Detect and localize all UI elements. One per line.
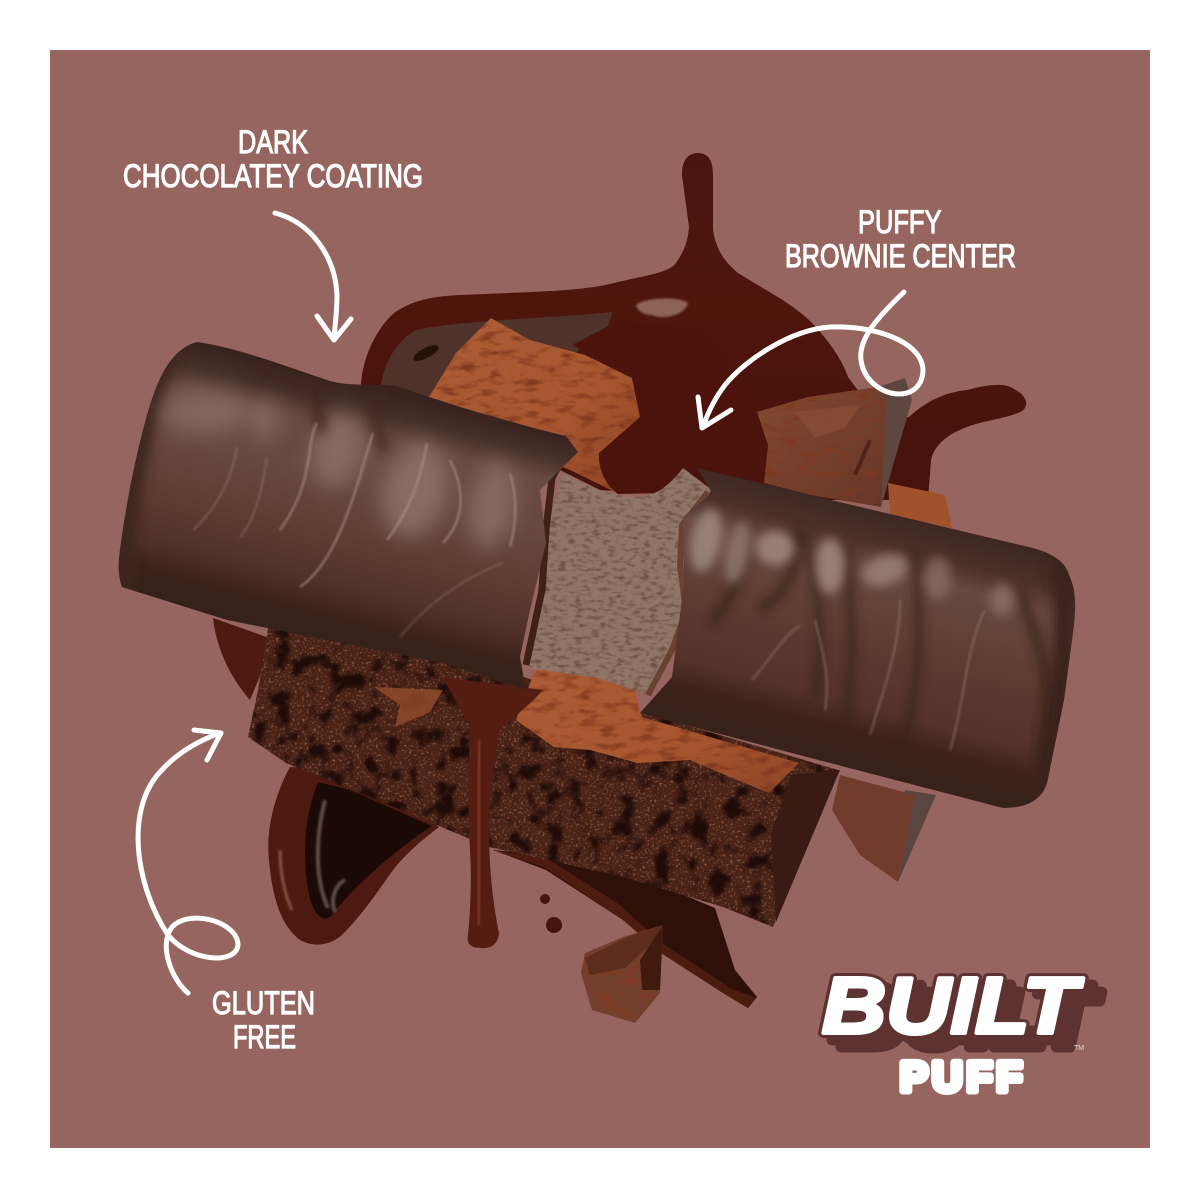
bar: right edge shadow xyxy=(1040,560,1066,800)
label: puffy brownie center: BROWNIE CENTER xyxy=(785,238,1016,274)
logo: Built Puff: BUILT xyxy=(822,961,1084,1050)
logo: Built Puff: BUILT xyxy=(831,968,1093,1057)
label: gluten free: GLUTEN xyxy=(212,985,315,1021)
chocolate droplets xyxy=(540,894,562,933)
brownie: top slab xyxy=(429,318,640,492)
filling: crumbly right edge xyxy=(648,492,708,695)
bar: right half xyxy=(640,468,1076,808)
product illustration: chocolate, brownie and bars xyxy=(100,153,1100,1023)
swoosh grey swirl xyxy=(318,800,345,912)
bar: dark creases left xyxy=(308,396,392,454)
logo: Built Puff: PUFF xyxy=(900,1053,1022,1100)
brownie: dark side face xyxy=(771,770,840,922)
swoosh dark interior xyxy=(305,782,432,918)
chocolate splash: lower right swoosh xyxy=(493,850,757,1008)
chocolate splash: grey reflection pool xyxy=(381,312,612,420)
arrow: to puffy brownie center xyxy=(698,292,923,428)
arrow: to gluten free xyxy=(138,730,238,993)
chocolate splash: spout highlight xyxy=(690,168,694,210)
bar: dark creases right xyxy=(712,525,1047,760)
bar: left half xyxy=(118,342,578,690)
chocolate splash: left behind bar xyxy=(213,618,275,700)
chocolate drip over top slab xyxy=(572,320,770,494)
bar: centre puffy filling xyxy=(526,468,712,695)
chocolate splash: upper xyxy=(361,153,1026,500)
chocolate splash: dark fleck xyxy=(411,342,441,364)
drip highlight xyxy=(478,740,480,925)
label: gluten free: FREE xyxy=(233,1019,296,1055)
bar: glaze lines right xyxy=(752,600,985,750)
label: puffy brownie center: PUFFY xyxy=(858,204,941,240)
logo: Built Puff: TM xyxy=(1074,1045,1084,1052)
logo: Built Puff xyxy=(822,961,1102,1100)
logo: Built Puff: BUILT xyxy=(822,961,1084,1050)
bar: soft highlights left xyxy=(160,390,521,552)
brownie: right side crumb xyxy=(888,483,952,528)
brownie: orange crust xyxy=(516,660,799,793)
arrow: to dark chocolatey coating xyxy=(275,213,351,340)
filling: crumbly left edge xyxy=(526,445,570,665)
bar: soft highlights right xyxy=(685,506,1014,616)
swoosh rim highlight xyxy=(280,850,292,910)
chocolate splash: lower left swoosh xyxy=(268,767,439,945)
bar: left edge shadow xyxy=(120,350,170,590)
brownie: left crust xyxy=(374,687,443,727)
logo: Built Puff: BUILT xyxy=(840,975,1102,1064)
label: dark chocolatey coating: DARK xyxy=(238,124,308,160)
swoosh brown edge xyxy=(493,850,756,1008)
chocolate drip: centre xyxy=(443,677,543,948)
label: dark chocolatey coating: CHOCOLATEY COATING xyxy=(123,158,423,194)
chocolate chunk: small bottom xyxy=(581,925,663,1023)
chocolate chunk: upper right xyxy=(757,378,912,507)
chocolate chunk: right under bar xyxy=(832,775,936,882)
chocolate splash: glossy highlight xyxy=(636,298,688,317)
brownie: main block xyxy=(248,610,840,927)
bar: glaze lines left xyxy=(193,423,515,637)
